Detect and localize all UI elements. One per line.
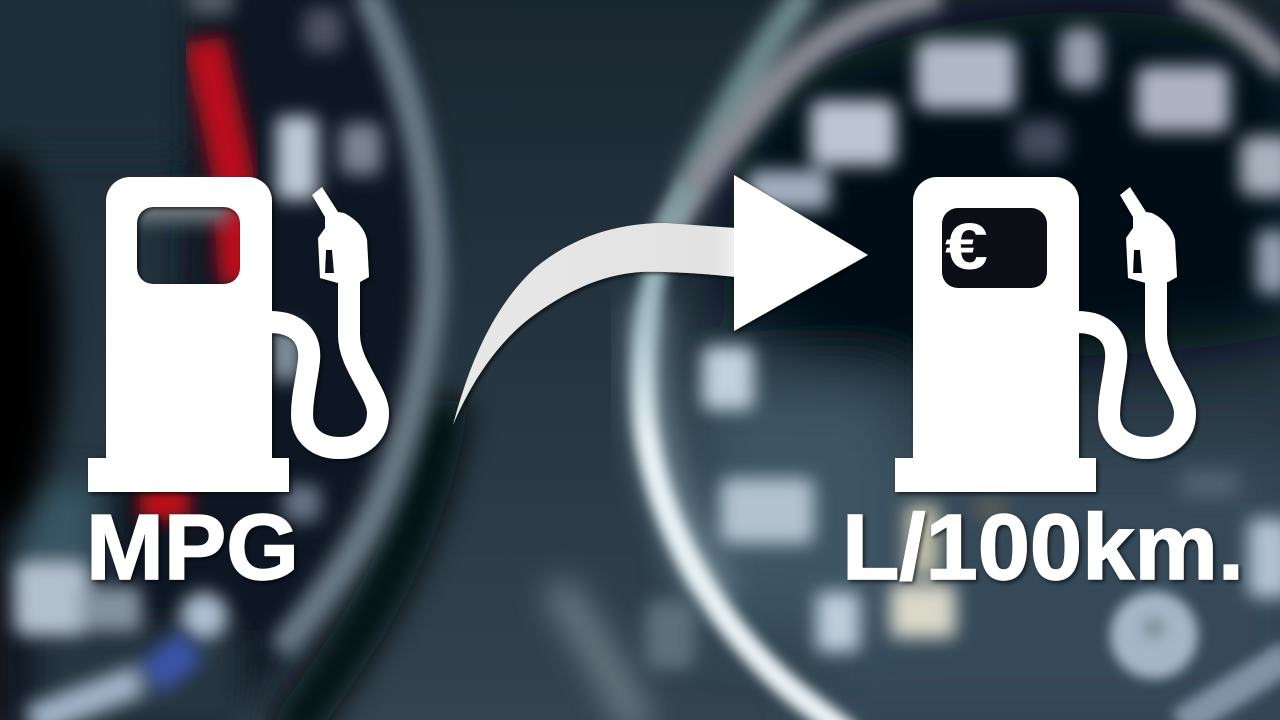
right dial number blobs [645,28,1280,670]
euro sign: € [945,209,988,283]
right gauge lower bar [1180,655,1280,720]
arrow head [734,175,868,331]
left black shadow [0,150,62,720]
right gauge ring dial [1110,591,1198,679]
nozzle [312,187,369,283]
nozzle [1120,187,1177,283]
hose [1077,280,1185,448]
icon: fuel pump right (L/100km) [895,177,1185,492]
left dial number blobs [14,0,382,640]
left dark outer rim [285,400,446,720]
centre lower band [555,585,640,720]
label: L/100km.: L/100km. [842,495,1244,599]
arrow: MPG to L/100km [453,175,868,425]
pump body with see-through display [88,177,289,492]
right dial ring upper bands [665,0,1280,240]
pump body [895,177,1096,492]
label: MPG: MPG [86,495,299,599]
left dial dark face [0,0,440,720]
left dial red zone [204,40,240,285]
left gauge blue needle bar [30,645,192,720]
arrow shaft [453,223,736,425]
icon: fuel pump left (MPG) [88,177,378,492]
right dial ring lower bright band [648,300,720,600]
left pump display backdrop [130,190,230,222]
right dial dark face [700,12,1280,720]
hose [270,280,378,448]
price display [942,208,1047,288]
left dial ring [280,0,433,650]
